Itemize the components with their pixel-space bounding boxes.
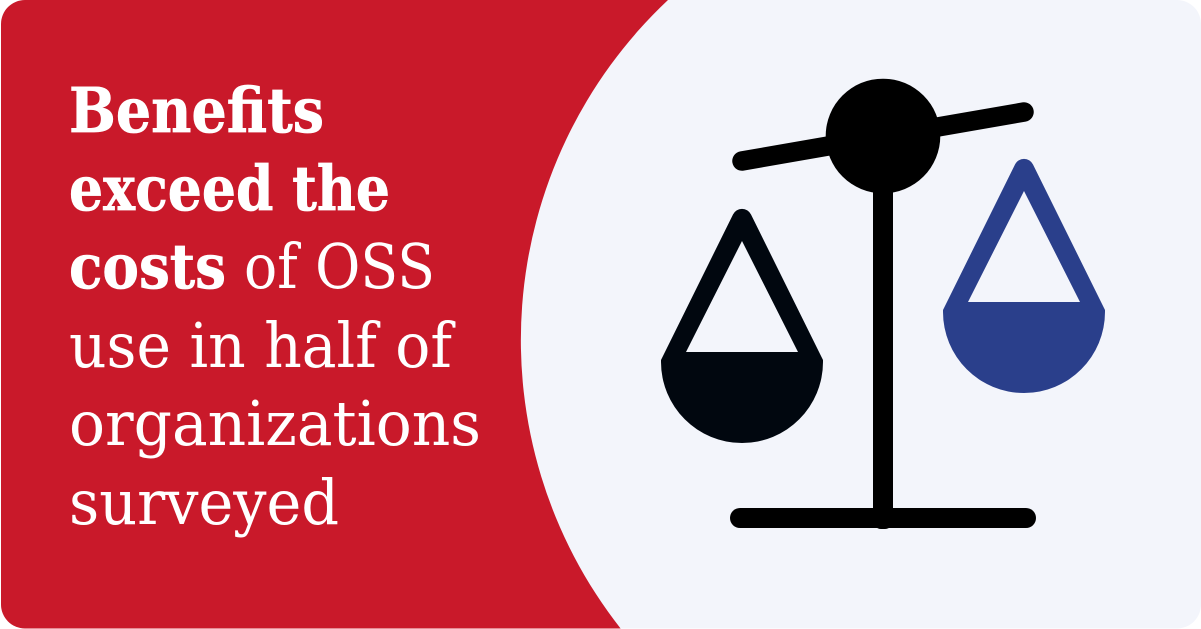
headline text: costs	[69, 230, 226, 303]
scale beam	[742, 112, 1024, 161]
left pan, black	[661, 209, 823, 443]
headline text: surveyed	[69, 466, 339, 539]
scale pivot	[826, 79, 940, 193]
right pan, blue	[943, 159, 1105, 393]
headline text: Benefits	[69, 74, 324, 147]
headline text	[69, 74, 481, 539]
headline text: organizations	[69, 387, 481, 460]
scale base	[730, 508, 1036, 528]
headline text: of OSS	[244, 230, 435, 303]
panel: red left side with curved edge	[0, 0, 668, 629]
headline text: use in half of	[69, 309, 456, 382]
icon: balance scale	[661, 79, 1105, 529]
scale stem	[873, 130, 893, 529]
headline text: exceed the	[69, 152, 390, 225]
panel: light right side	[521, 0, 1201, 628]
